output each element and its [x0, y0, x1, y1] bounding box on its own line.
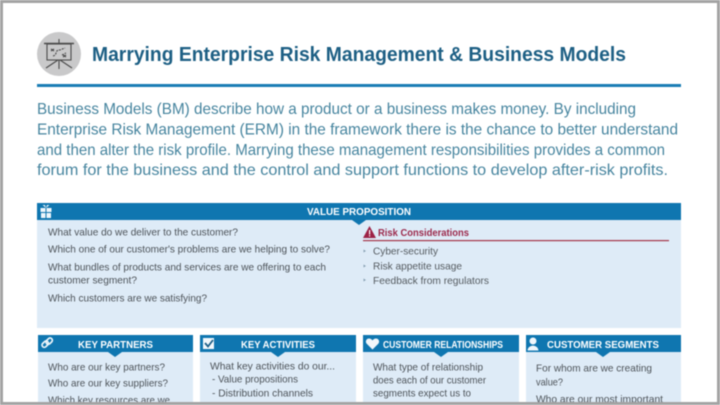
key partners header	[38, 335, 193, 357]
customer segments questions: For whom are we creating	[536, 364, 652, 374]
risk list: Risk appetite usage	[373, 262, 462, 272]
risk list	[364, 246, 489, 287]
key partners questions: Who are our key suppliers?	[48, 378, 168, 390]
customer relationships text: segments expect us to	[373, 388, 471, 400]
customer segments header: CUSTOMER SEGMENTS	[547, 339, 659, 351]
icon: warning triangle	[363, 226, 376, 238]
key partners questions	[48, 362, 170, 405]
customer segments header	[526, 335, 681, 357]
customer relationships text: What type of relationship	[373, 362, 483, 374]
customer relationships text: does each of our customer	[373, 376, 486, 386]
risk heading: Risk Considerations	[378, 227, 469, 239]
key activities text: What key activities do our...	[210, 362, 335, 372]
intro text block: forum for the business and the control and support functions to develop after-risk profits.	[37, 162, 668, 179]
icon: presentation board with strategy diagram	[37, 32, 81, 76]
key partners questions: Who are our key partners?	[48, 362, 165, 374]
panel: customer segments	[526, 335, 681, 405]
value proposition questions: Which customers are we satisfying?	[48, 294, 207, 304]
key activities header	[200, 335, 356, 357]
value proposition questions	[48, 228, 330, 304]
key partners header: KEY PARTNERS	[78, 339, 153, 351]
customer relationships header	[363, 335, 519, 357]
icon: checkbox	[203, 338, 214, 349]
icon: person	[528, 338, 538, 350]
customer relationships text	[373, 362, 486, 400]
panel: key partners	[38, 335, 193, 405]
value proposition questions: What value do we deliver to the customer?	[48, 228, 238, 238]
risk list: Cyber-security	[373, 246, 439, 258]
intro text block: and then alter the risk profile. Marrying these management responsibilities provides a common	[37, 142, 665, 159]
icon: link	[41, 337, 53, 348]
key activities text: - Distribution channels	[212, 388, 313, 400]
key activities text	[210, 362, 335, 400]
panel: value proposition	[37, 203, 681, 328]
intro text block: Enterprise Risk Management (ERM) in the framework there is the chance to better understand	[37, 122, 678, 138]
value proposition questions: Which one of our customer's problems are we helping to solve?	[48, 244, 330, 256]
icon: heart	[366, 338, 379, 350]
intro text block: Business Models (BM) describe how a product or a business makes money. By including	[37, 101, 636, 118]
intro text block	[37, 101, 678, 179]
customer segments questions	[536, 364, 663, 405]
panel: customer relationships	[363, 335, 519, 405]
title: Marrying Enterprise Risk Management & Business Models	[92, 44, 626, 66]
risk considerations callout	[363, 226, 669, 287]
header rule	[37, 84, 681, 87]
panel background	[37, 220, 681, 328]
value proposition header bar: VALUE PROPOSITION	[307, 206, 411, 218]
value proposition questions: What bundles of products and services are we offering to each	[48, 262, 326, 274]
customer segments questions: value?	[536, 378, 563, 388]
value proposition header bar	[37, 203, 681, 225]
key activities header: KEY ACTIVITIES	[241, 339, 315, 351]
icon: gift	[40, 205, 52, 218]
value proposition questions: customer segment?	[48, 276, 137, 286]
panel: key activities	[200, 335, 356, 405]
customer relationships header: CUSTOMER RELATIONSHIPS	[383, 340, 503, 351]
key activities text: - Value propositions	[212, 374, 298, 386]
risk list: Feedback from regulators	[373, 276, 489, 287]
